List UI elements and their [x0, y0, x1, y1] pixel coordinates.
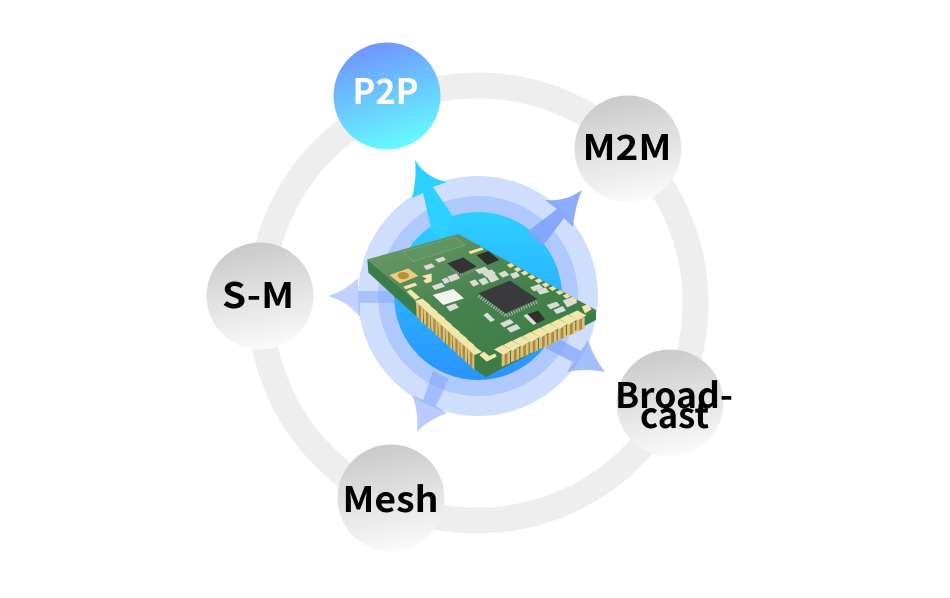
connector: [389, 268, 418, 283]
small components: [423, 257, 577, 333]
outer ring: [260, 86, 696, 520]
arrow to Mesh: [412, 371, 449, 432]
radio chip: [447, 257, 477, 276]
small chip: [523, 311, 545, 325]
node: S-M: S-M: [222, 268, 294, 319]
PCB module: [367, 234, 596, 377]
node: Mesh: [338, 444, 444, 552]
hub middle ring: [378, 196, 578, 396]
left castellated pads: [415, 299, 482, 370]
back edge pads: [507, 263, 578, 303]
arrow to S-M: [328, 278, 394, 317]
right castellated pads: [494, 310, 586, 367]
arrow to M2M: [527, 190, 582, 246]
hub outer ring: [358, 176, 598, 416]
crystal: [433, 289, 464, 305]
node: Broadcast: [615, 350, 733, 456]
node: S-M: [206, 242, 314, 350]
node: Broadcast: cast: [640, 388, 709, 439]
hub inner disc: [394, 212, 562, 380]
node: M2M: M2M: [582, 120, 672, 171]
arrow to Broadcast: [545, 336, 605, 372]
node: M2M: [574, 96, 682, 202]
antenna trace: [403, 237, 465, 262]
board top: [367, 234, 596, 358]
node: P2P: [334, 42, 440, 150]
arrow to P2P: [412, 160, 452, 240]
node: Mesh: Mesh: [342, 472, 438, 523]
board side: [367, 259, 596, 377]
node: Broadcast: Broad-: [615, 368, 733, 419]
central hub with arrows: [328, 160, 605, 432]
dark module: [477, 251, 499, 265]
main chip: [478, 281, 537, 316]
silkscreen pads: [403, 247, 592, 362]
node: P2P: P2P: [352, 64, 418, 115]
